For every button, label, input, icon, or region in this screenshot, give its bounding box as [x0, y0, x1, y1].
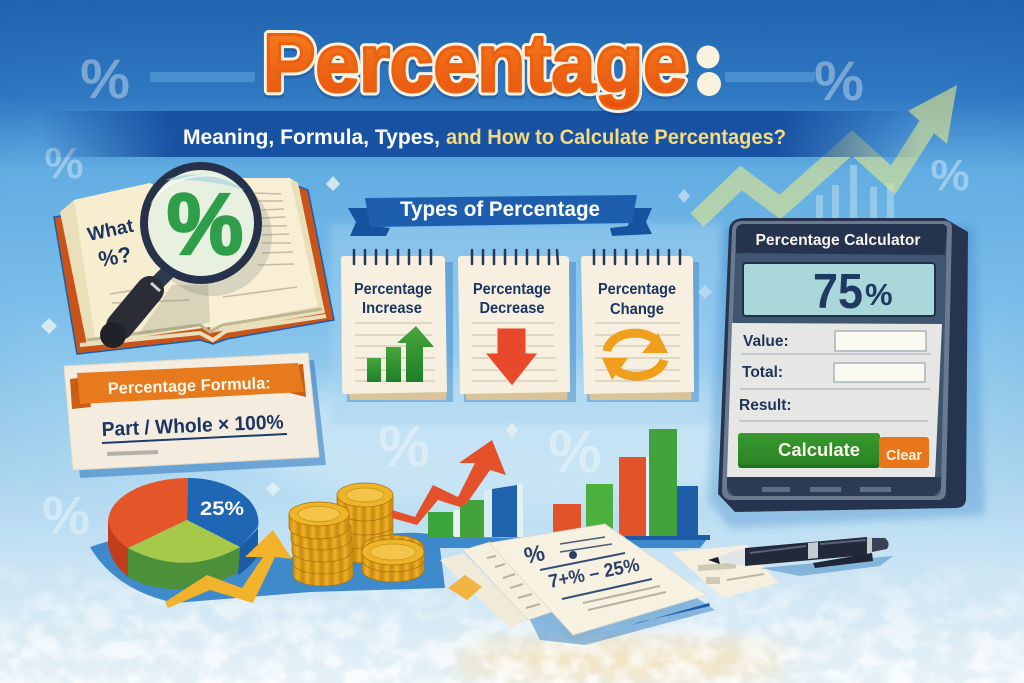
icon: rising bars and arrow	[367, 326, 434, 382]
pen tip	[708, 548, 747, 565]
subtitle ribbon	[0, 111, 1024, 157]
title: :	[697, 29, 720, 107]
calculator form: Total:	[742, 364, 783, 381]
notepad text	[598, 281, 676, 318]
calculator form	[727, 323, 942, 477]
magnifier handle	[100, 268, 172, 348]
spiral rings	[594, 250, 680, 264]
calculate button: Calculate	[778, 439, 860, 460]
papers and worksheet	[440, 524, 778, 645]
notepad text	[354, 281, 432, 317]
decorative diamonds	[41, 176, 712, 496]
panel: percentage formula card	[64, 353, 326, 478]
notepad text	[473, 281, 551, 317]
calculator form: Result:	[739, 397, 792, 414]
faint percent signs	[42, 47, 970, 546]
worksheet formula	[522, 537, 666, 610]
clear button: Clear	[886, 448, 922, 464]
calculator footer	[727, 477, 941, 496]
heading: types of percentage banner: Types of Percentage	[400, 197, 600, 221]
ground shadow wave	[90, 533, 710, 603]
icon: down arrow	[485, 328, 538, 386]
book cover	[54, 183, 334, 354]
faint percent signs: %	[42, 486, 90, 546]
label: what percent	[86, 216, 136, 272]
calculator header: Percentage Calculator	[756, 232, 920, 249]
faint percent signs: %	[44, 139, 84, 188]
pie sides	[108, 520, 128, 577]
notepad text: Increase	[362, 300, 422, 317]
title: Percentage	[263, 18, 687, 109]
icon: cycle arrows	[602, 333, 668, 380]
back sheet	[440, 553, 528, 628]
title: Percentage	[263, 18, 687, 109]
calculator form: Value:	[743, 333, 789, 350]
formula text: Part / Whole × 100%	[101, 411, 284, 441]
icon: coin stacks	[289, 483, 424, 586]
spiral rings	[472, 250, 558, 264]
notepad text: Decrease	[480, 300, 545, 317]
big green percent: %	[167, 177, 243, 273]
panel: percentage decrease notepad	[458, 250, 576, 402]
small stack	[362, 535, 424, 582]
pie blue slice	[187, 478, 258, 547]
calculator display	[743, 263, 935, 319]
middle sheet	[463, 542, 552, 620]
label: what percent: %?	[97, 242, 133, 272]
panel: open book with magnifier	[54, 166, 334, 354]
book pages	[60, 178, 326, 345]
icon: pen	[708, 537, 893, 576]
calculator display: 75	[813, 265, 863, 319]
sticky tag	[448, 575, 482, 600]
notepad text: Percentage	[598, 281, 676, 298]
chart: small bars with red arrow	[392, 440, 523, 537]
label: what percent: What	[86, 216, 136, 246]
title: Percentage	[263, 21, 687, 112]
subtitle ribbon: and How to Calculate Percentages?	[446, 125, 786, 149]
lens shadow	[138, 285, 210, 335]
pie green slice	[128, 520, 240, 563]
calculator body	[718, 218, 968, 512]
faint percent signs: %	[930, 151, 970, 200]
calculate button	[738, 433, 880, 468]
clear button	[879, 437, 929, 468]
faint percent signs: %	[548, 418, 602, 485]
panel: percentage calculator	[708, 218, 985, 528]
worksheet formula: 7+% – 25%	[547, 555, 641, 593]
calculator display: %	[865, 277, 893, 312]
chart: large bars	[553, 429, 710, 540]
heading: types of percentage banner	[348, 195, 652, 236]
orange ribbon: Percentage Formula:	[108, 374, 271, 398]
faint percent signs: %	[80, 47, 130, 110]
faint percent signs: %	[378, 414, 430, 479]
fold shadow	[632, 603, 710, 625]
subtitle ribbon: Meaning, Formula, Types,	[183, 125, 440, 149]
main worksheet	[489, 524, 707, 635]
calculator header	[736, 224, 947, 255]
orange ribbon	[70, 363, 306, 409]
notepad text: Change	[610, 301, 664, 318]
panel: percentage increase notepad	[341, 250, 453, 402]
back stack	[337, 483, 393, 563]
magnifier lens	[144, 166, 258, 280]
chart: pie	[108, 478, 258, 589]
background rising arrow and bars	[697, 85, 957, 220]
notepad text: Percentage	[473, 281, 551, 298]
front stack	[289, 502, 353, 586]
worksheet formula: %	[522, 539, 547, 569]
panel: percentage change notepad	[581, 250, 699, 402]
notepad text: Percentage	[354, 281, 432, 298]
note sheet	[672, 545, 778, 598]
spiral rings	[354, 250, 431, 264]
pie red slice	[108, 478, 188, 548]
faint percent signs: %	[814, 49, 864, 112]
red arrow	[392, 440, 506, 525]
pie label: 25%	[200, 499, 244, 520]
icon: yellow arrow	[165, 530, 292, 608]
